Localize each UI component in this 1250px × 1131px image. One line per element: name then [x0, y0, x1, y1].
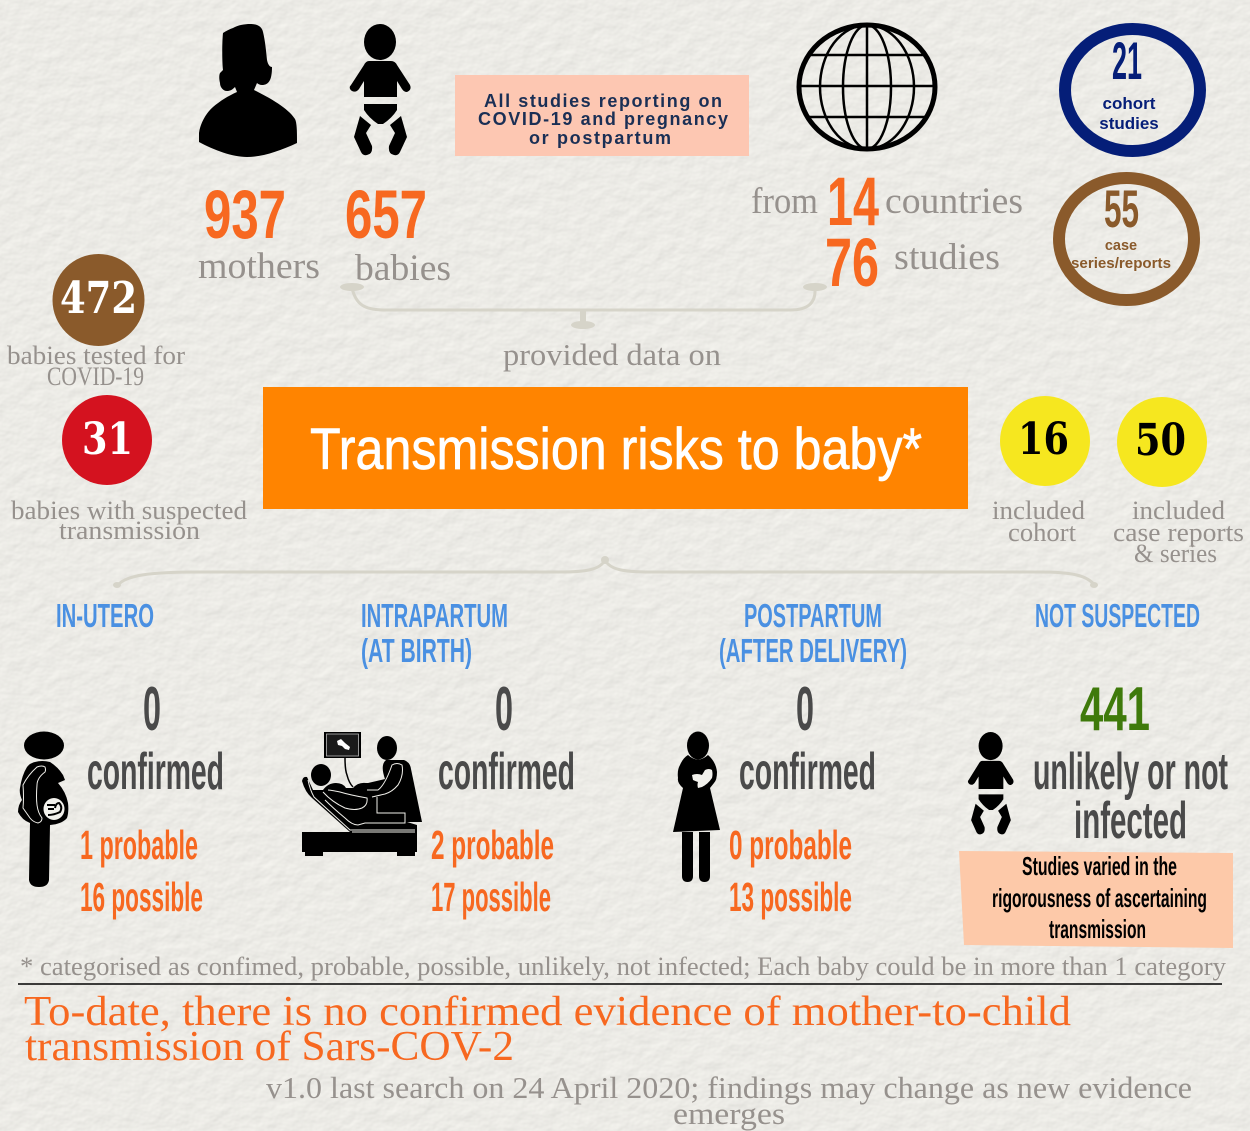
badge: 31 suspected transmission: babies with suspected — [11, 496, 247, 525]
badge: 21 cohort studies: 21 — [1112, 32, 1142, 91]
version note: v1.0 last search on 24 April 2020; findings may change as new evidence — [266, 1070, 1192, 1105]
heading: postpartum: (AFTER DELIVERY) — [719, 632, 907, 669]
count: 0 probable 13 possible — [729, 822, 852, 920]
count: 0 probable 13 possible: 13 possible — [729, 874, 852, 920]
count: 0 probable 13 possible: 0 probable — [729, 822, 852, 868]
heading: intrapartum: INTRAPARTUM — [361, 597, 508, 634]
count: 1 probable 16 possible: 16 possible — [80, 874, 203, 920]
heading: postpartum: POSTPARTUM — [744, 597, 882, 634]
version note — [266, 1070, 1192, 1131]
panel: not suspected — [959, 597, 1233, 948]
count: 0 confirmed — [87, 675, 224, 801]
badge: 31 suspected transmission — [11, 395, 247, 545]
count: 2 probable 17 possible: 17 possible — [431, 874, 551, 920]
stat: 657 babies — [345, 176, 451, 289]
callout: rigour note: transmission — [1049, 914, 1146, 944]
badge: 50 included case reports: & series — [1134, 539, 1217, 568]
icon: globe — [799, 25, 935, 149]
stat: from 14 countries: from — [751, 181, 818, 222]
stat: 76 studies — [825, 224, 1000, 301]
badge: 55 case series — [1059, 178, 1194, 300]
callout: rigour note — [959, 851, 1233, 948]
badge: 55 case series: 55 — [1104, 180, 1139, 239]
badge: 55 case series: case — [1105, 238, 1137, 254]
stat: 657 babies: babies — [355, 248, 451, 289]
icon: mother holding baby — [673, 732, 720, 882]
icon: ultrasound at bedside — [302, 732, 422, 856]
version note: emerges — [673, 1096, 785, 1131]
badge: 50 included case reports: case reports — [1113, 518, 1244, 547]
count: 2 probable 17 possible: 2 probable — [431, 822, 554, 868]
icon: pregnant woman — [18, 732, 68, 887]
badge: 21 cohort studies — [1065, 29, 1200, 151]
badge: 21 cohort studies: studies — [1099, 114, 1159, 133]
arrow: top bracket connector — [340, 283, 827, 329]
heading: intrapartum — [361, 597, 508, 669]
heading: intrapartum: (AT BIRTH) — [361, 632, 472, 669]
stat: 937 mothers: mothers — [198, 246, 320, 287]
icon: baby — [968, 732, 1014, 834]
stat: 76 studies: 76 — [825, 224, 879, 301]
stat: from 14 countries — [751, 163, 1023, 240]
count: 0 confirmed: confirmed — [438, 743, 575, 801]
count: 0 confirmed: 0 — [143, 675, 161, 744]
badge: 472 babies tested: COVID-19 — [47, 362, 144, 391]
icon: baby silhouette — [350, 24, 411, 155]
count: 0 confirmed: 0 — [495, 675, 513, 744]
stat: 657 babies: 657 — [345, 176, 427, 253]
stat: from 14 countries: countries — [885, 181, 1023, 222]
conclusion statement: transmission of Sars-COV-2 — [25, 1024, 514, 1070]
count: 0 confirmed: 0 — [796, 675, 814, 744]
callout: all studies — [455, 75, 749, 156]
conclusion statement: To-date, there is no confirmed evidence of mother-to-child — [24, 989, 1071, 1035]
count: 2 probable 17 possible — [431, 822, 554, 920]
count: 0 confirmed: confirmed — [739, 743, 876, 801]
title banner — [263, 387, 968, 509]
stat: 76 studies: studies — [894, 237, 1000, 278]
callout: all studies: or postpartum — [529, 128, 671, 148]
label: unlikely or not infected — [1033, 743, 1228, 850]
label: provided data on: provided data on — [503, 337, 722, 372]
callout: all studies: COVID-19 and pregnancy — [478, 109, 728, 129]
badge: 16 included cohort: included — [992, 496, 1085, 525]
stat: from 14 countries: 14 — [827, 163, 879, 240]
badge: 472 babies tested — [7, 254, 185, 391]
badge: 16 included cohort — [992, 396, 1090, 547]
arrow: category bracket connector — [113, 556, 1098, 588]
panel: in-utero — [18, 597, 224, 920]
badge: 21 cohort studies: cohort — [1103, 94, 1156, 113]
badge: 50 included case reports: 50 — [1135, 415, 1186, 466]
count: 0 confirmed: confirmed — [87, 743, 224, 801]
heading: in-utero: IN-UTERO — [56, 597, 154, 634]
badge: 50 included case reports — [1113, 397, 1244, 568]
count: 0 confirmed — [438, 675, 575, 801]
title banner: Transmission risks to baby* — [310, 417, 922, 482]
count: 441: 441 — [1080, 675, 1150, 744]
count: 1 probable 16 possible: 1 probable — [80, 822, 198, 868]
footnote: * categorised as confimed, probable, possible, unlikely, not infected; Each baby could be in more than 1 category — [20, 952, 1226, 981]
badge: 31 suspected transmission: 31 — [82, 414, 133, 465]
callout: all studies: All studies reporting on — [484, 91, 722, 111]
panel: intrapartum — [302, 597, 575, 920]
conclusion statement — [24, 989, 1071, 1070]
badge: 55 case series: series/reports — [1071, 256, 1171, 272]
badge: 16 included cohort: cohort — [1008, 518, 1077, 547]
count: 0 confirmed — [739, 675, 876, 801]
stat: 937 mothers: 937 — [204, 176, 286, 253]
icon: mother silhouette — [199, 24, 297, 157]
stat: 937 mothers — [198, 176, 320, 287]
badge: 472 babies tested: babies tested for — [7, 341, 185, 370]
badge: 16 included cohort: 16 — [1018, 414, 1069, 465]
panel: postpartum — [673, 597, 907, 920]
badge: 31 suspected transmission: transmission — [59, 516, 200, 545]
count: 1 probable 16 possible — [80, 822, 203, 920]
badge: 50 included case reports: included — [1132, 496, 1225, 525]
badge: 472 babies tested: 472 — [60, 273, 137, 324]
heading: postpartum — [719, 597, 907, 669]
